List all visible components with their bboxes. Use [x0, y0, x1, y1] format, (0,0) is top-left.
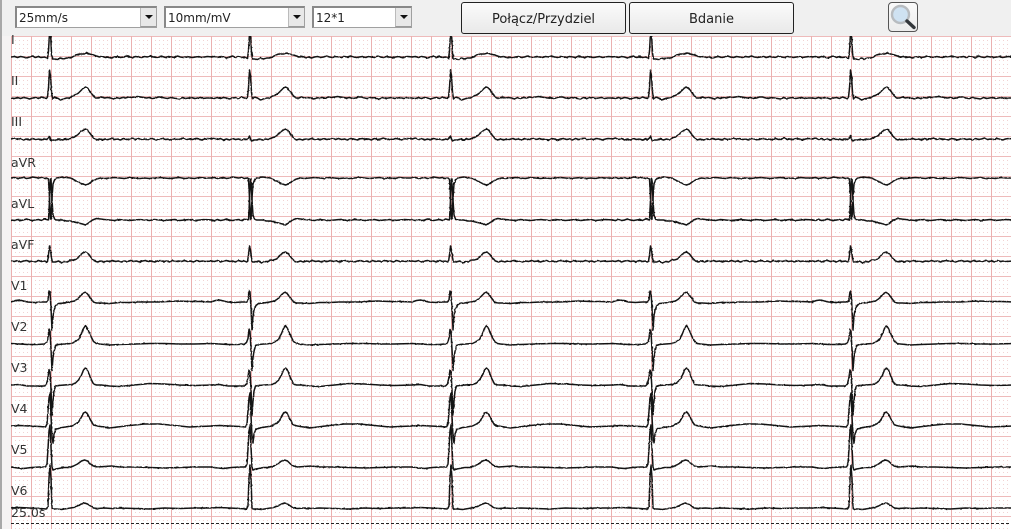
connect button — [461, 2, 626, 34]
lead V4 trace — [11, 393, 1011, 443]
layout dropdown: 12*1 — [316, 11, 345, 25]
gain dropdown — [164, 6, 305, 28]
lead labels: I — [11, 32, 15, 47]
examination button: Bdanie — [689, 12, 734, 27]
lead V1 trace — [11, 291, 1011, 330]
lead labels: V3 — [11, 360, 28, 375]
time label: 25.0s — [11, 505, 45, 520]
lead labels: V4 — [11, 401, 28, 416]
lead aVF trace — [11, 246, 1011, 263]
lead labels: V6 — [11, 483, 28, 498]
lead labels: V1 — [11, 278, 28, 293]
lead aVL trace — [11, 179, 1011, 225]
lead aVR trace — [11, 177, 1011, 219]
bottom dashed time axis — [11, 522, 1011, 524]
toolbar — [0, 0, 1011, 36]
lead labels — [11, 32, 36, 498]
left margin strip — [0, 0, 2, 529]
lead V3 trace — [11, 368, 1011, 415]
layout dropdown — [312, 6, 412, 28]
lead labels: II — [11, 73, 18, 88]
lead V2 trace — [11, 326, 1011, 370]
lead III trace — [11, 129, 1011, 141]
lead labels: V2 — [11, 319, 28, 334]
icon: magnifier — [888, 2, 918, 32]
lead II trace — [11, 70, 1011, 100]
lead I trace — [11, 33, 1011, 60]
lead labels: V5 — [11, 442, 28, 457]
lead labels: III — [11, 114, 22, 129]
gain dropdown: 10mm/mV — [168, 11, 231, 25]
connect button: Połącz/Przydziel — [492, 12, 595, 27]
lead labels: aVR — [11, 155, 36, 170]
speed dropdown — [15, 6, 157, 28]
lead labels: aVF — [11, 237, 34, 252]
examination button — [629, 2, 794, 34]
speed dropdown: 25mm/s — [19, 11, 68, 25]
lead labels: aVL — [11, 196, 34, 211]
lead V5 trace — [11, 425, 1011, 470]
lead V6 trace — [11, 465, 1011, 510]
